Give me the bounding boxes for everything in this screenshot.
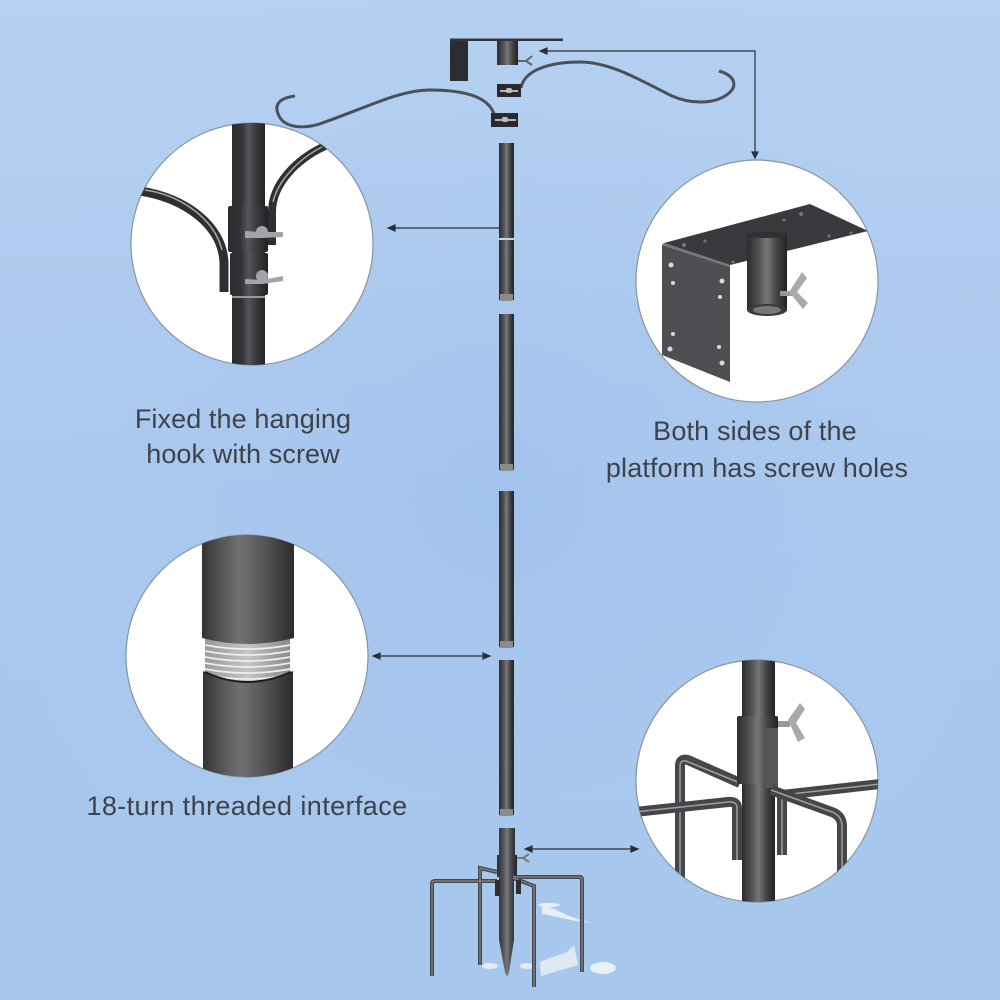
text: hook caption: Fixed the hanging	[135, 404, 351, 434]
icon: upper wing nut	[245, 226, 283, 238]
text: platform caption: platform has screw holes	[606, 453, 908, 483]
panel: platform bracket detail	[636, 160, 878, 402]
panel: threaded interface detail	[126, 530, 368, 780]
platform bracket exploded view	[450, 38, 563, 81]
lower hanging hook	[277, 90, 518, 127]
pole section 4	[499, 660, 514, 816]
pole section 1	[499, 143, 514, 301]
upper hanging hook	[497, 62, 734, 102]
panel: hook clamp detail	[131, 120, 373, 370]
text: thread caption: 18-turn threaded interface	[86, 791, 408, 821]
arrow: thread callout	[373, 653, 490, 659]
panel: ground stake detail	[635, 655, 880, 905]
pole section 3	[499, 491, 514, 648]
arrow: base callout	[525, 846, 638, 852]
arrow: hook callout	[388, 225, 500, 231]
text: platform caption: Both sides of the	[653, 416, 857, 446]
text: hook caption: hook with screw	[146, 439, 340, 469]
ground stake base	[432, 828, 616, 987]
icon: lower wing nut	[245, 270, 283, 284]
arrow: platform callout	[540, 48, 758, 158]
pole section 2	[499, 314, 514, 471]
